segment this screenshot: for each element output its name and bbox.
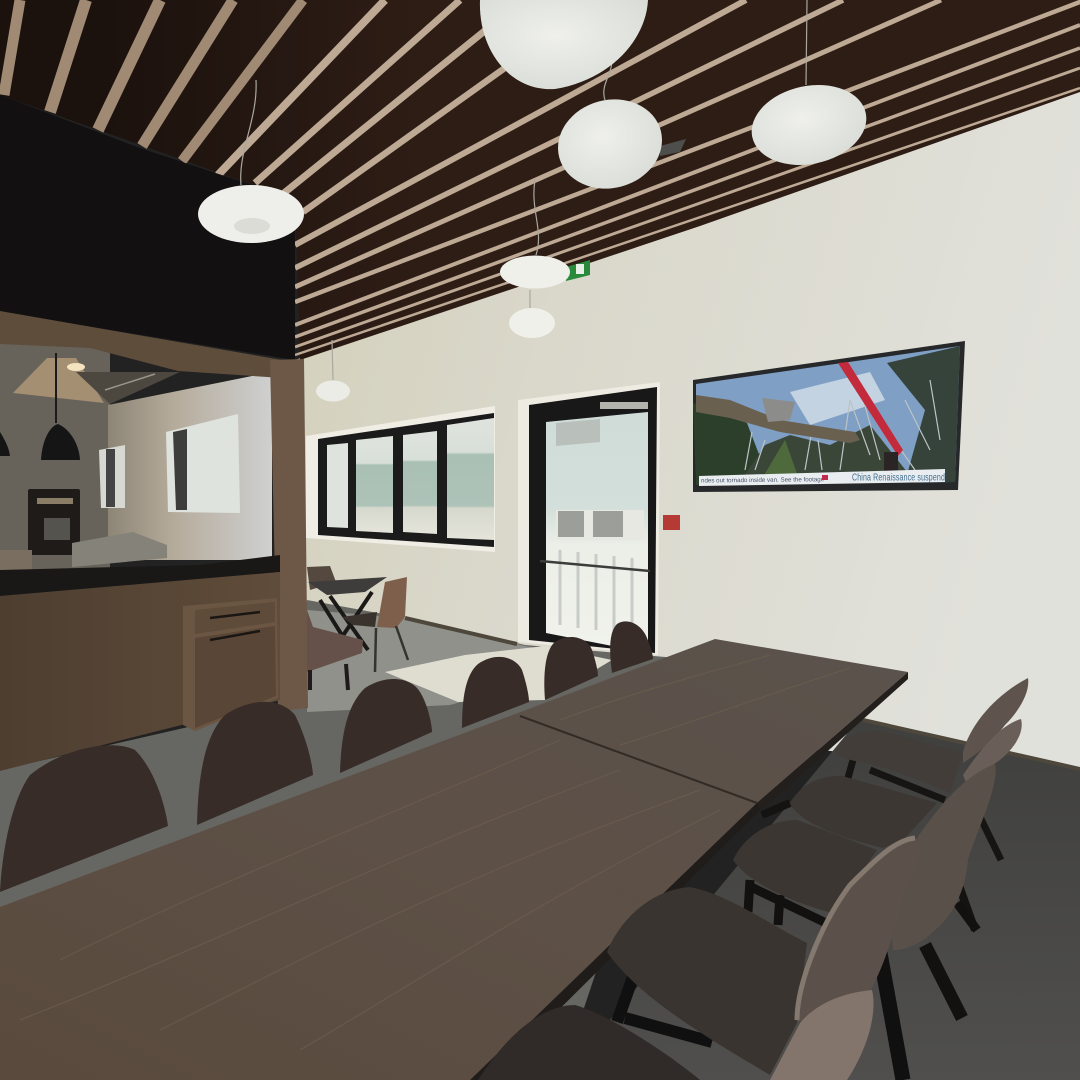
drawer unit <box>183 598 278 731</box>
globe light 5 <box>500 256 570 288</box>
far side chairs <box>0 621 653 892</box>
globe light 3 <box>744 75 874 175</box>
globe light 1 <box>480 0 648 89</box>
right chair 3 <box>733 764 996 1018</box>
right chair 2 <box>762 719 1022 930</box>
TV screen <box>693 341 965 492</box>
wood pillar <box>270 359 308 711</box>
range hood <box>13 358 104 403</box>
wall skirting <box>405 618 1080 769</box>
large kitchen window <box>166 414 240 513</box>
small kitchen window <box>99 445 125 508</box>
chair 2 <box>197 702 313 825</box>
sunlit floor patch <box>385 646 612 702</box>
right chair 5 <box>478 990 874 1080</box>
table <box>0 639 908 1080</box>
TV screen: ndes out tornado inside van. See the footage <box>701 476 825 484</box>
pendant lamps <box>0 353 80 460</box>
chair 6 <box>610 621 653 673</box>
emergency exit sign <box>566 260 590 281</box>
far floor area <box>307 610 610 712</box>
left floor <box>0 600 700 1080</box>
globe light 6 <box>509 308 555 338</box>
ceiling spotlight <box>67 363 85 371</box>
chair 1 <box>0 745 168 892</box>
steel appliances <box>72 532 167 567</box>
TV screen: China Renaissance suspend <box>852 472 945 484</box>
right wall <box>295 90 1080 775</box>
kitchen interior <box>0 340 272 580</box>
kitchen counter <box>0 555 280 771</box>
right chair 1 <box>835 678 1028 860</box>
right chair 4 <box>607 838 921 1080</box>
window band <box>306 406 495 552</box>
globe light 4 <box>198 185 304 243</box>
right floor <box>560 718 1080 1080</box>
balcony door <box>518 382 660 655</box>
chair 5 <box>544 637 598 700</box>
chair 3 <box>340 679 432 773</box>
wood frame beam <box>0 311 282 378</box>
globe light 2 <box>548 88 672 200</box>
black wall <box>0 95 295 360</box>
espresso machine <box>28 489 80 555</box>
globe light 7 <box>316 380 350 402</box>
hanging globe lights <box>198 0 874 402</box>
slatted ceiling <box>0 0 1080 360</box>
far seating area <box>307 566 408 690</box>
near side chairs <box>478 678 1028 1080</box>
fire alarm button <box>663 515 680 530</box>
chair 4 <box>462 657 529 728</box>
